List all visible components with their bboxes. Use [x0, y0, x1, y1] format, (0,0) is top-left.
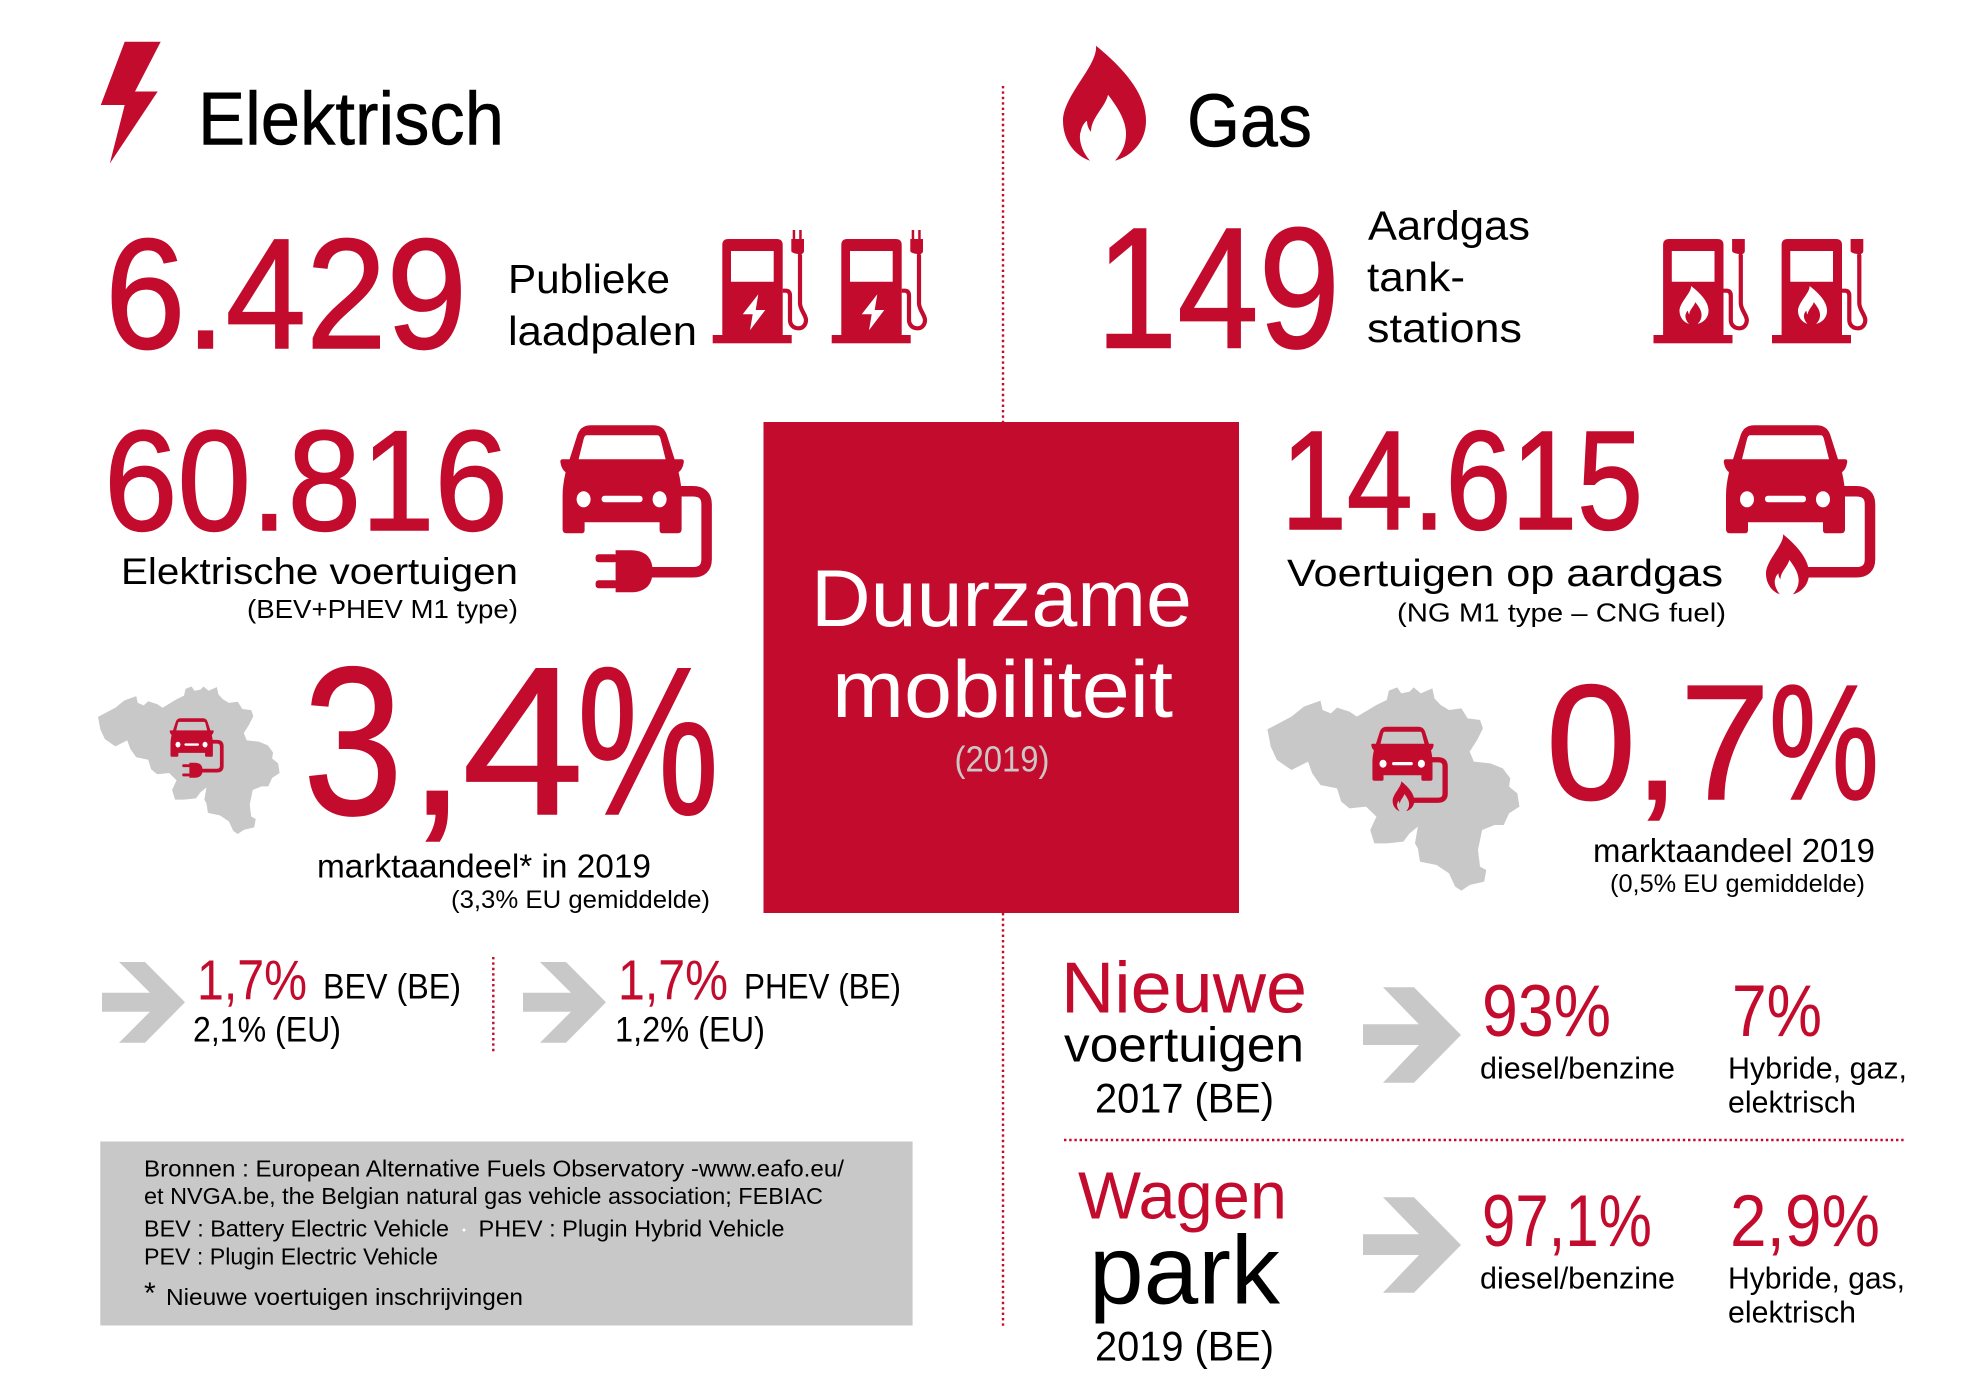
map: belgium with electric car: [98, 686, 280, 834]
stat: 7%: 7%: [1732, 971, 1822, 1052]
text: bronnen line 2: et NVGA.be, the Belgian natural gas vehicle association; FEBIAC: [144, 1183, 823, 1209]
label: hybride gaz elektrisch: elektrisch: [1728, 1085, 1856, 1120]
panel: nieuwe voertuigen: [1061, 949, 1907, 1121]
stat: 93%: 93%: [1482, 971, 1611, 1052]
heading: 2017 (BE): 2017 (BE): [1095, 1074, 1274, 1121]
stat: 0,7%: 0: [1546, 651, 1636, 834]
icon: gas car with flame: [1724, 425, 1870, 594]
stat: 3,4%: 4: [462, 623, 584, 859]
label: 1,2% (EU): 1,2% (EU): [615, 1011, 765, 1050]
panel: bev share: [102, 948, 461, 1050]
stat: 1,7% PHEV: 1,7%: [618, 948, 728, 1012]
label: publieke laadpalen: Publieke: [508, 256, 670, 302]
label: 2,1% (EU): 2,1% (EU): [193, 1011, 341, 1050]
heading: Elektrisch: Elektrisch: [198, 77, 504, 161]
stat: 0,7%: 7: [1680, 651, 1770, 834]
stat: 0,7%: %: [1769, 651, 1879, 834]
icon: charging station 1: [713, 230, 806, 343]
label: BEV (BE): BEV (BE): [323, 967, 461, 1006]
label: 3,3% EU gemiddelde: (3,3% EU gemiddelde): [451, 886, 710, 914]
text: BEV definition: BEV : Battery Electric Vehicle: [144, 1215, 449, 1241]
heading: park: park: [1089, 1215, 1280, 1324]
stat: 60.816: 60.816: [104, 402, 508, 561]
heading: voertuigen: voertuigen: [1064, 1019, 1304, 1073]
label: marktaandeel 2019: marktaandeel 2019: [1593, 832, 1875, 869]
heading: Wagen: Wagen: [1078, 1158, 1287, 1233]
panel: elektrisch: [98, 42, 925, 914]
arrow: [102, 962, 185, 1043]
stat: 0,7%: ,: [1634, 651, 1680, 834]
panel: wagenpark: [1078, 1158, 1905, 1370]
label: publieke laadpalen: laadpalen: [508, 308, 697, 354]
label: elektrische voertuigen: Elektrische voertuigen: [121, 551, 518, 592]
year: (2019): [954, 739, 1050, 780]
label: aardgas tankstations: tank-: [1367, 254, 1465, 300]
heading: 2019 (BE): 2019 (BE): [1095, 1323, 1274, 1370]
arrow: [523, 962, 606, 1043]
title line 2: mobiliteit: [832, 645, 1173, 735]
text: footnote: Nieuwe voertuigen inschrijvingen: [166, 1284, 523, 1310]
text: asterisk: *: [144, 1277, 156, 1310]
label: diesel/benzine: diesel/benzine: [1480, 1260, 1675, 1295]
icon: charging station 2: [832, 230, 925, 343]
panel: gas: [1063, 46, 1879, 898]
map: belgium with gas car: [1267, 687, 1519, 891]
stat: 6.429: 6.429: [105, 207, 467, 382]
heading: Nieuwe: Nieuwe: [1061, 949, 1307, 1029]
centre divider: [1002, 86, 1004, 1328]
label: diesel/benzine: diesel/benzine: [1480, 1050, 1675, 1085]
heading: Gas: Gas: [1187, 78, 1312, 162]
label: hybride gas elektrisch: elektrisch: [1728, 1295, 1856, 1330]
stat: 2,9%: 2,9%: [1730, 1181, 1880, 1262]
label: aardgas tankstations: stations: [1367, 305, 1522, 351]
label: voertuigen op aardgas: Voertuigen op aardgas: [1287, 553, 1723, 595]
label: hybride gas elektrisch: Hybride, gas,: [1728, 1260, 1905, 1295]
label: hybride gaz elektrisch: Hybride, gaz,: [1728, 1050, 1907, 1085]
label: bev+phev type: (BEV+PHEV M1 type): [247, 594, 518, 624]
stat: 3,4%: ,: [408, 623, 466, 859]
icon: flame: [1063, 46, 1146, 161]
panel: sources: [100, 1142, 913, 1326]
stat: 1,7% BEV: 1,7%: [197, 948, 307, 1012]
stat: 3,4%: 3: [303, 623, 403, 859]
label: aardgas tankstations: Aardgas: [1368, 202, 1530, 248]
stat: 3,4%: %: [577, 623, 719, 859]
text: PHEV definition: PHEV : Plugin Hybrid Vehicle: [478, 1215, 784, 1241]
stat: 97,1%: 97,1%: [1482, 1181, 1652, 1262]
icon: gas station 1: [1654, 239, 1747, 343]
text: PEV definition: PEV : Plugin Electric Vehicle: [144, 1243, 438, 1269]
stat: 14.615: 14.615: [1281, 401, 1643, 559]
icon: gas station 2: [1772, 239, 1865, 343]
icon: lightning bolt: [101, 42, 161, 164]
label: marktaandeel in 2019: marktaandeel* in 2019: [317, 848, 651, 885]
icon: electric car with plug: [560, 425, 707, 592]
text: bronnen: Bronnen : European Alternative Fuels Observatory -www.eafo.eu/: [144, 1156, 845, 1182]
stat: 149: 149: [1096, 192, 1340, 384]
arrow: [1363, 987, 1461, 1083]
label: 0,5% EU gemiddelde: (0,5% EU gemiddelde): [1610, 870, 1865, 898]
label: NG M1 type: (NG M1 type – CNG fuel): [1397, 598, 1726, 628]
panel: central title: [764, 422, 1239, 913]
title line 1: Duurzame: [811, 554, 1192, 644]
arrow: [1363, 1197, 1461, 1293]
panel: phev share: [523, 948, 901, 1050]
label: PHEV (BE): PHEV (BE): [744, 967, 901, 1006]
